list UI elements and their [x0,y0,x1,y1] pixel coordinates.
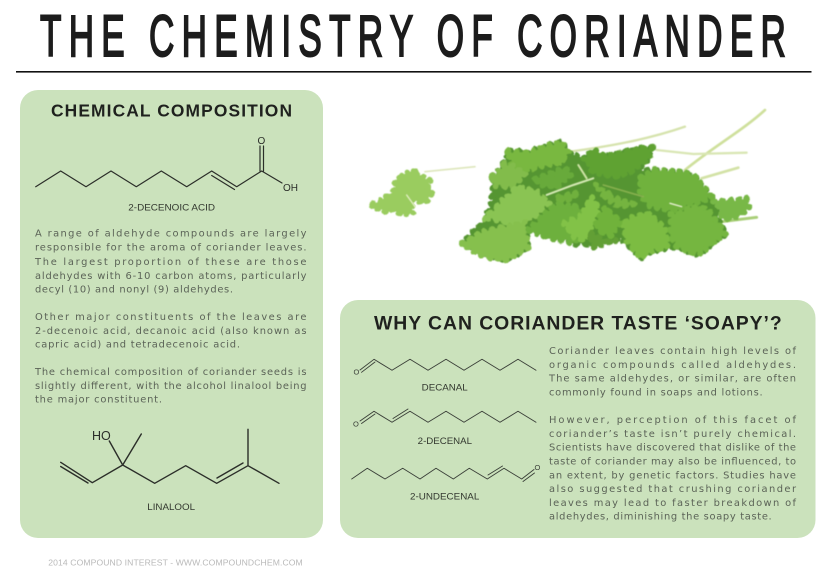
text block: genetic factors: an extent, by genetic factors. Studies have [549,470,796,481]
text block: soaps and lotions: commonly found in soaps and lotions. [549,388,763,399]
text block: genetic factors: coriander’s taste isn’t purely chemical. [549,429,796,440]
label: 2-decenoic acid: 2-DECENOIC ACID [128,202,215,213]
text block: genetic factors: aldehydes, diminishing the soapy taste. [549,511,772,522]
text block: aldehydes: aldehydes with 6-10 carbon atoms, particularly [35,271,307,282]
heading: chemical composition: CHEMICAL COMPOSITION [51,101,292,121]
text block: genetic factors: leaves may lead to faster breakdown of [549,498,797,509]
footer credit: 2014 COMPOUND INTEREST - WWW.COMPOUNDCHEM.COM [48,557,303,567]
molecule: 2-decenal [353,409,536,428]
text block: soaps and lotions [548,346,797,399]
text block: seeds: The chemical composition of coriander seeds is [34,367,306,378]
molecule: 2-decenoic acid: O [258,136,266,147]
label: linalool: LINALOOL [147,501,195,512]
molecule: 2-undecenal: O [534,463,540,472]
molecule: decanal [354,359,536,376]
leaf veins [407,165,682,207]
image: coriander leaves [373,110,765,261]
text block: seeds: slightly different, with the alcohol linalool being [35,381,306,392]
text block: aldehydes: A range of aldehyde compounds are largely [35,229,307,240]
text block: aldehydes: The largest proportion of these are those [34,257,306,268]
molecule: 2-undecenal [352,463,540,482]
panel: chemical composition [20,90,323,538]
text block: seeds [34,367,306,406]
heading: why can coriander taste soapy: WHY CAN CORIANDER TASTE ‘SOAPY’? [374,312,782,334]
text block: genetic factors: Scientists have discovered that dislike of the [549,443,796,454]
text block: genetic factors: also suggested that crushing coriander [549,484,797,495]
label: 2-decenal: 2-DECENAL [418,435,472,446]
text block: aldehydes: responsible for the aroma of coriander leaves. [35,243,306,254]
label: 2-undecenal: 2-UNDECENAL [410,490,479,501]
text block: genetic factors: However, perception of this facet of [549,415,797,426]
text block: genetic factors: taste of coriander may also be influenced, to [549,456,796,467]
text block: soaps and lotions: The same aldehydes, or similar, are often [548,374,796,385]
molecule: linalool: HO [92,429,111,443]
molecule: decanal: O [354,368,360,376]
text block: other constituents: capric acid) and tetradecenoic acid. [35,340,240,351]
text block: soaps and lotions: organic compounds called aldehydes. [549,360,796,371]
molecule: 2-decenoic acid: OH [283,183,298,194]
title: THE CHEMISTRY OF CORIANDER [40,4,786,69]
text block: soaps and lotions: Coriander leaves contain high levels of [549,346,797,357]
molecule: 2-decenoic acid [36,136,298,194]
detached leaf [373,172,433,216]
molecule: linalool [61,429,279,483]
text block: other constituents: Other major constituents of the leaves are [35,312,306,323]
text block: other constituents [35,312,306,351]
text block: seeds: the major constituent. [35,395,162,406]
label: decanal: DECANAL [422,382,468,393]
stems [425,110,765,222]
molecule: 2-decenal: O [353,420,359,428]
leaf cluster [463,141,749,261]
text block: genetic factors [549,415,797,522]
panel: why can coriander taste soapy [340,300,816,538]
text block: aldehydes [34,229,307,296]
text block: other constituents: 2-decenoic acid, decanoic acid (also known as [35,326,306,337]
text block: aldehydes: decyl (10) and nonyl (9) aldehydes. [35,285,233,296]
